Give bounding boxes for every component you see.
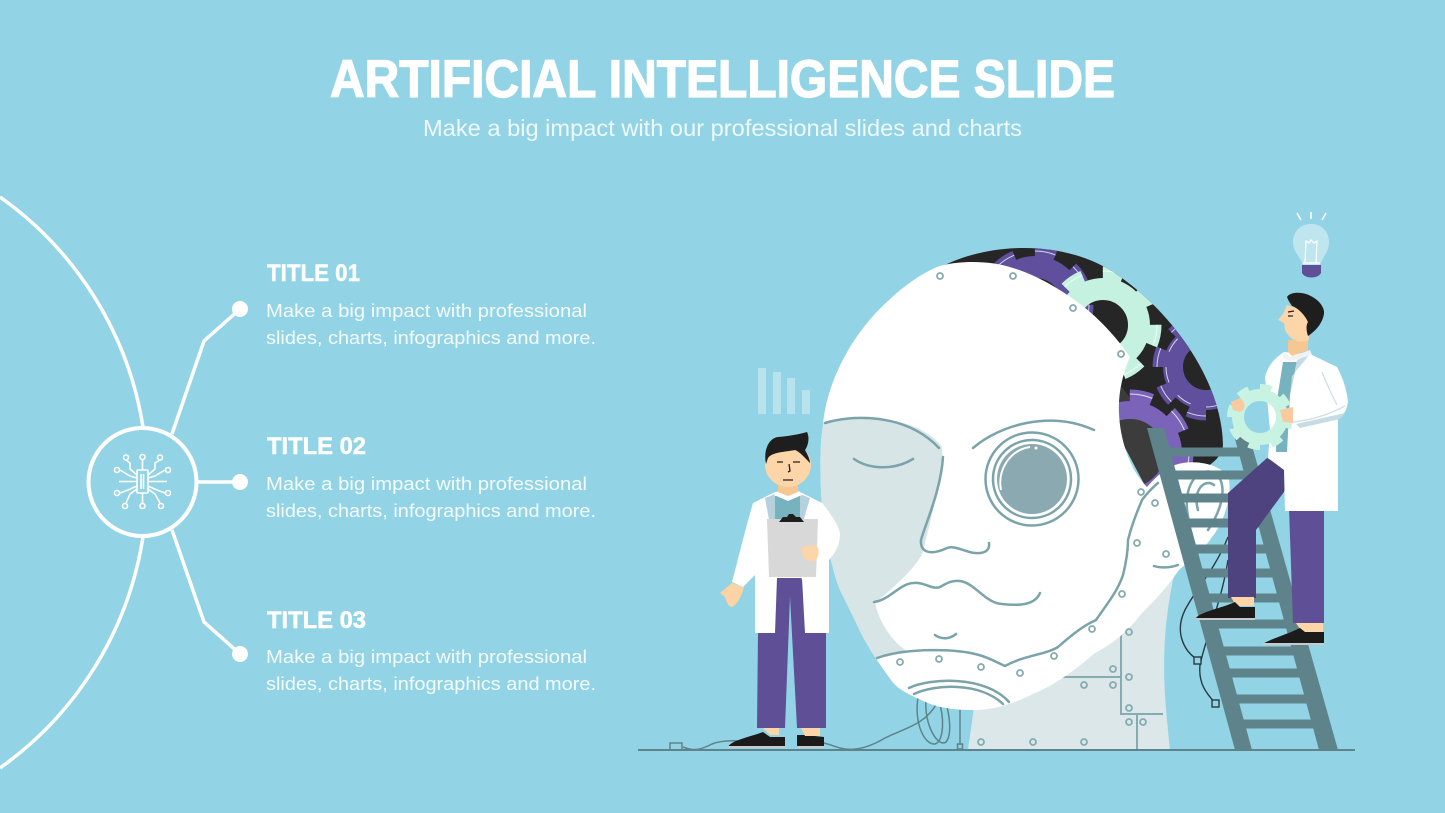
text block 03: [266, 607, 596, 694]
gear: mint: [1049, 271, 1157, 379]
held gear: [1231, 388, 1289, 446]
text block 01: slides, charts, infographics and more.: [266, 328, 596, 348]
trousers: [757, 578, 826, 728]
neck: [968, 575, 1174, 750]
near leg: [1228, 458, 1290, 598]
text block 03: TITLE 03: [267, 607, 366, 634]
clipboard: [767, 519, 818, 577]
scientist on ladder: [1196, 293, 1348, 645]
lab coat: [1265, 352, 1348, 511]
face: [765, 443, 811, 487]
vest and shirt: [765, 494, 810, 522]
hub circle: [88, 428, 196, 536]
connector 01: [172, 301, 248, 434]
clipboard clip: [779, 514, 804, 522]
face shade: [820, 419, 942, 658]
facial features: [777, 462, 800, 480]
text block 01: TITLE 01: [267, 260, 360, 287]
face: [810, 262, 1230, 710]
far leg: [1289, 508, 1324, 623]
hands: [1231, 398, 1293, 423]
shoes: [728, 732, 824, 748]
icon: light bulb: [1293, 212, 1329, 278]
ladder: [1147, 428, 1338, 750]
hair: [765, 432, 810, 464]
text block 02: TITLE 02: [267, 433, 366, 460]
lab coat: [732, 492, 840, 633]
shoes: [1196, 602, 1324, 645]
connector 02: [197, 474, 248, 490]
illustration: AI head and scientists: [638, 212, 1355, 750]
hair: [1287, 293, 1324, 336]
face: [1278, 305, 1309, 342]
ladder cable: [1180, 537, 1228, 707]
connector 03: [172, 530, 248, 662]
text block 02: slides, charts, infographics and more.: [266, 501, 596, 521]
face lines: [825, 418, 1223, 704]
eye: [1288, 311, 1294, 316]
left hand: [720, 583, 744, 607]
title: ARTIFICIAL INTELLIGENCE SLIDE: [330, 50, 1115, 109]
hub diagram: [0, 197, 248, 768]
text block 01: Make a big impact with professional: [266, 301, 587, 321]
shirt: [1276, 362, 1297, 452]
gear: purple right: [1152, 326, 1218, 420]
scientist with clipboard: [720, 432, 840, 748]
large arc: [0, 197, 143, 768]
ankles: [1231, 597, 1323, 632]
text block 03: slides, charts, infographics and more.: [266, 674, 596, 694]
icon: AI chip: [114, 454, 170, 508]
text block 02: Make a big impact with professional: [266, 474, 587, 494]
chart icon: bars: [758, 368, 810, 414]
gear: purple lower: [1118, 390, 1194, 487]
gear: purple top: [994, 248, 1094, 314]
coat sleeve line: [1293, 372, 1345, 422]
mechanical eye: [986, 432, 1078, 526]
neck: [778, 480, 798, 496]
text block 01: [266, 260, 596, 348]
collar: [1283, 350, 1312, 361]
neck: [1288, 340, 1308, 356]
right hand: [802, 545, 819, 561]
text block 02: [266, 433, 596, 521]
subtitle: Make a big impact with our professional slides and charts: [423, 115, 1022, 141]
ground line: [638, 749, 1355, 751]
rivets: [897, 273, 1169, 745]
sleeve shade: [1296, 413, 1345, 428]
back of head with gears: [945, 248, 1223, 487]
text block 03: Make a big impact with professional: [266, 647, 587, 667]
wires and coil: [670, 697, 962, 750]
